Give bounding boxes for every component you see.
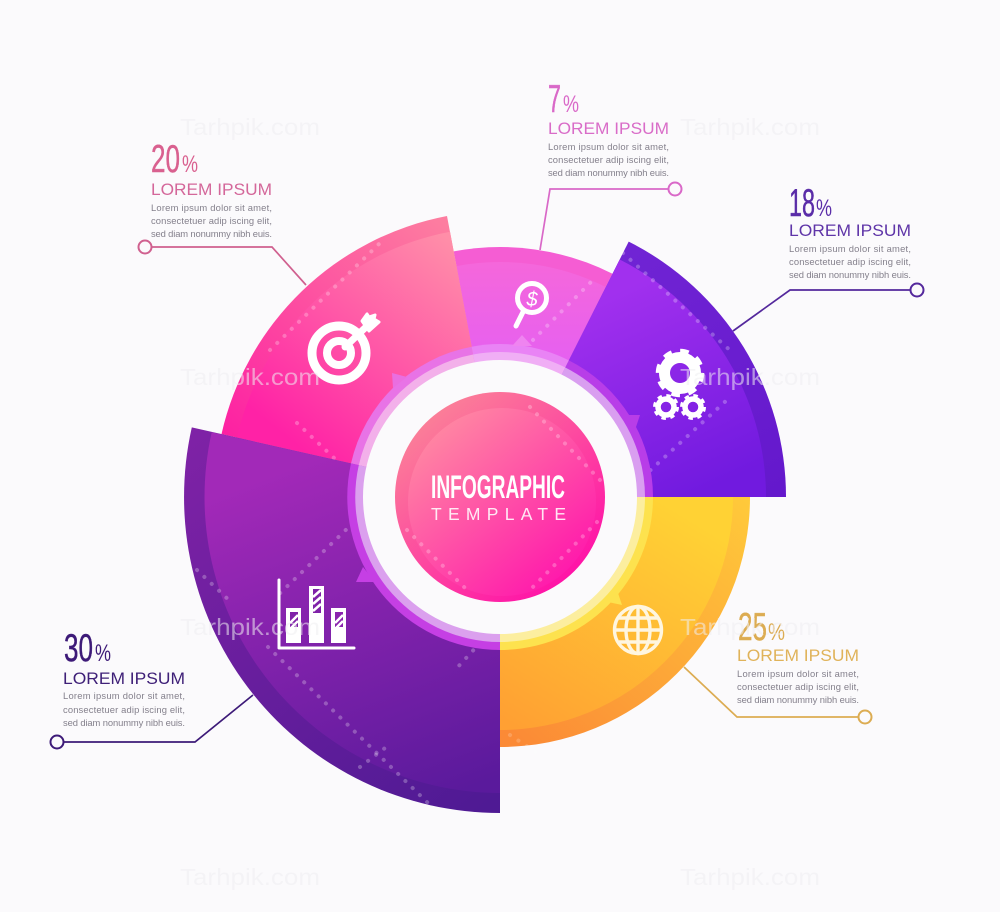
callout: 25%: % <box>768 619 785 646</box>
callout: 18%: 18 <box>789 182 815 225</box>
watermark: Tarhpik.com <box>180 114 320 140</box>
callout: 20%: Lorem ipsum dolor sit amet, <box>151 202 272 213</box>
callout: 7%: consectetuer adip iscing elit, <box>548 154 669 165</box>
callout: 30%: LOREM IPSUM <box>63 670 185 688</box>
callout: 25% <box>684 606 872 724</box>
callout: 7%: Lorem ipsum dolor sit amet, <box>548 141 669 152</box>
centre title <box>431 469 566 524</box>
callout: 30%: % <box>95 640 111 667</box>
watermark: Tarhpik.com <box>680 864 820 890</box>
callout: 20%: LOREM IPSUM <box>151 181 272 199</box>
callout: 20%: consectetuer adip iscing elit, <box>151 215 272 226</box>
icon: bar chart <box>279 580 354 648</box>
callout: 20% <box>138 138 306 285</box>
centre title: TEMPLATE <box>431 504 566 524</box>
callout: 20%: % <box>182 151 198 178</box>
callout: 18%: LOREM IPSUM <box>789 222 911 240</box>
callout: 7% <box>540 78 682 250</box>
centre title: INFOGRAPHIC <box>431 469 565 505</box>
callout: 25%: 25 <box>738 606 767 649</box>
callout: 18%: % <box>816 195 832 222</box>
centre circle <box>395 392 605 602</box>
callout: 30%: sed diam nonummy nibh euis. <box>63 717 185 728</box>
icon: magnifier with dollar: $ <box>525 289 538 311</box>
callout: 30%: Lorem ipsum dolor sit amet, <box>63 690 185 701</box>
callout: 30% <box>50 627 253 748</box>
watermark: Tarhpik.com <box>680 114 820 140</box>
callout: 25%: sed diam nonummy nibh euis. <box>737 694 859 705</box>
watermark: Tarhpik.com <box>180 364 320 390</box>
callout: 18%: sed diam nonummy nibh euis. <box>789 269 911 280</box>
callout: 7%: % <box>563 91 579 118</box>
segment: magenta 7% <box>454 247 612 497</box>
callout: 7%: sed diam nonummy nibh euis. <box>548 167 669 178</box>
watermark: Tarhpik.com <box>680 364 820 390</box>
watermark: Tarhpik.com <box>680 614 820 640</box>
watermark: Tarhpik.com <box>180 864 320 890</box>
icon: gears <box>654 351 704 418</box>
icon: magnifier with dollar <box>516 284 546 326</box>
segment: pink 20% <box>222 216 500 497</box>
callout: 7%: LOREM IPSUM <box>548 120 669 138</box>
callout: 18%: consectetuer adip iscing elit, <box>789 256 911 267</box>
callout: 20%: 20 <box>151 138 180 181</box>
callout: 25%: Lorem ipsum dolor sit amet, <box>737 668 859 679</box>
segment: purple 30% <box>184 427 500 813</box>
callout: 7%: 7 <box>548 78 561 121</box>
segment: orange 25% <box>500 497 750 755</box>
icon: target <box>312 314 379 380</box>
ring around centre <box>347 335 653 650</box>
segment: violet 18% <box>500 242 786 497</box>
callout: 30%: 30 <box>64 627 93 670</box>
callout: 25%: consectetuer adip iscing elit, <box>737 681 859 692</box>
watermark: Tarhpik.com <box>180 614 320 640</box>
callout: 18% <box>733 182 924 331</box>
callout: 18%: Lorem ipsum dolor sit amet, <box>789 243 911 254</box>
callout: 30%: consectetuer adip iscing elit, <box>63 704 185 715</box>
icon: globe <box>614 606 662 654</box>
watermark <box>180 114 820 890</box>
callout: 25%: LOREM IPSUM <box>737 647 859 665</box>
callout: 20%: sed diam nonummy nibh euis. <box>151 228 272 239</box>
